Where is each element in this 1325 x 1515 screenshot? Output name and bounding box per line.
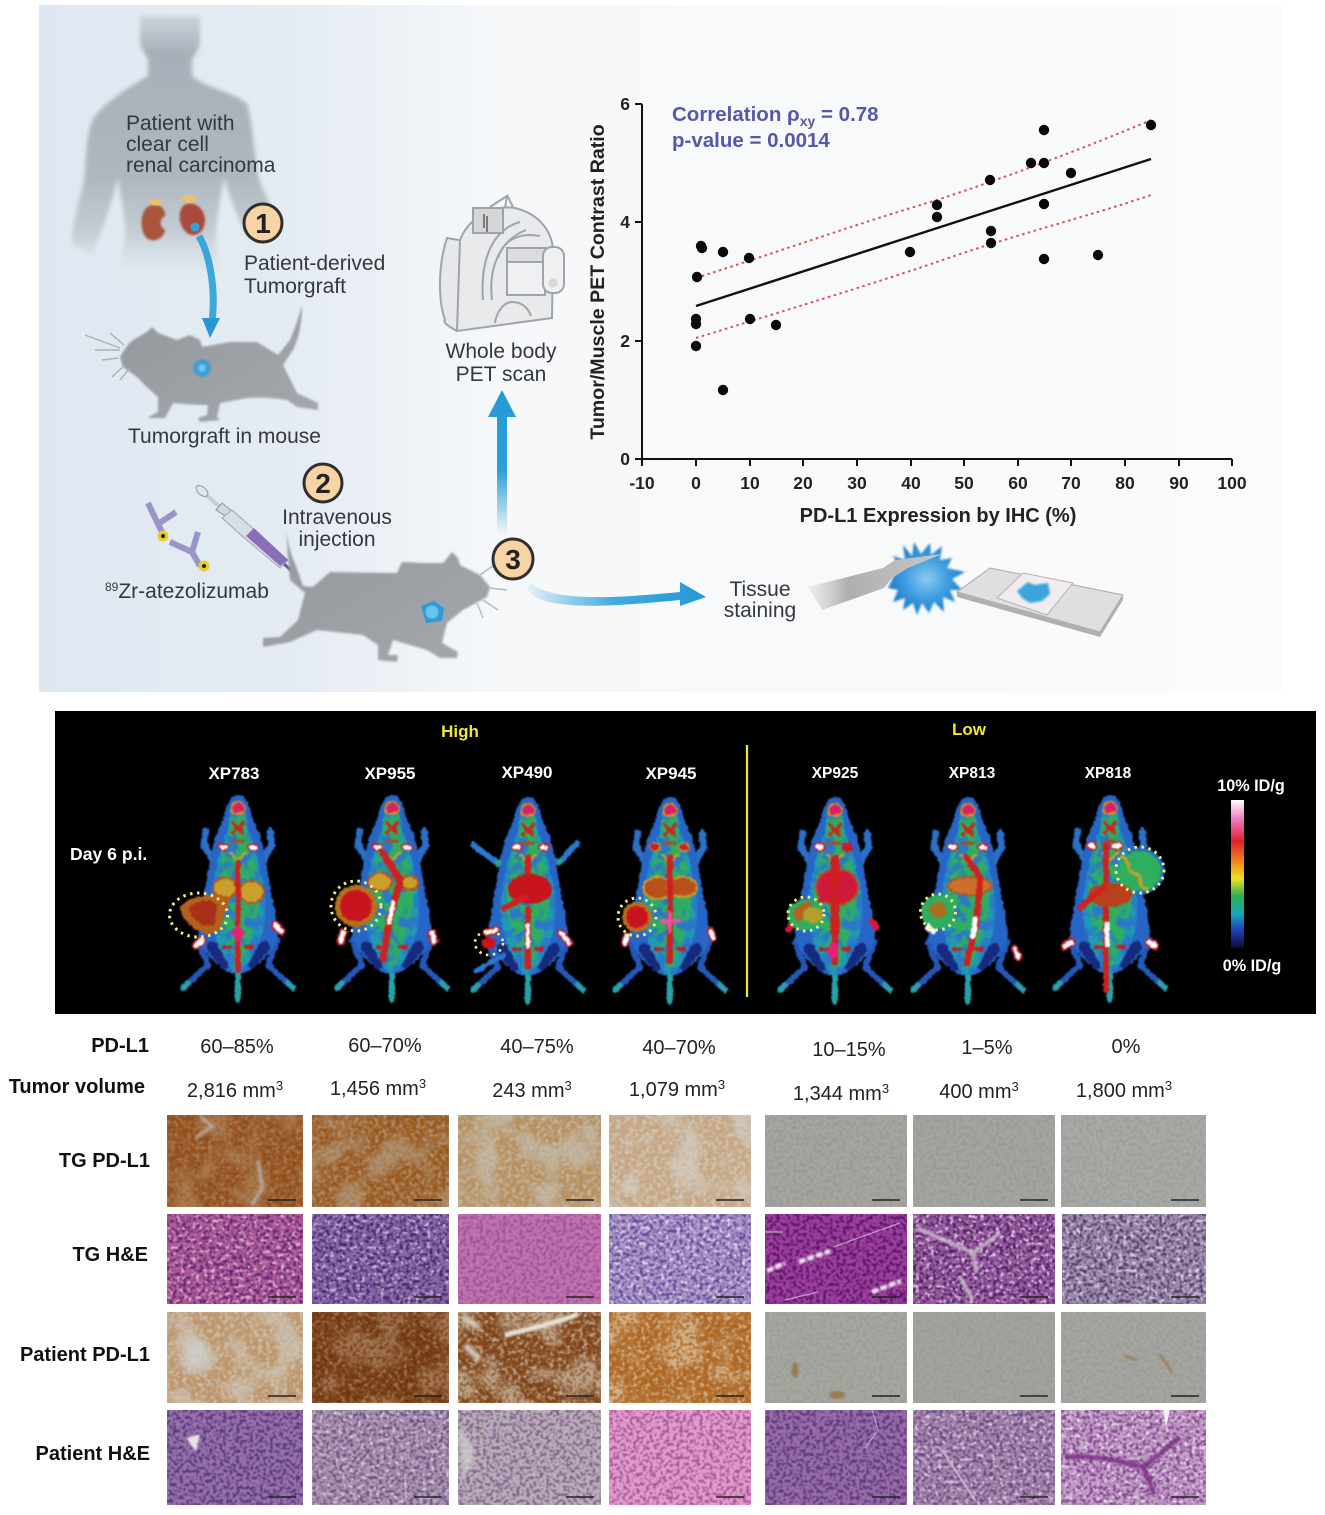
row: tumor volume: 3 [882,1081,889,1096]
legend: PET color scale [1217,777,1285,975]
row: tumor volume: 3 [1165,1078,1172,1093]
sample labels: XP945 [645,764,697,783]
divider: high vs low [746,745,748,997]
histology row: Patient PD-L1 [167,1312,1206,1403]
row: tumor volume: 3 [718,1077,725,1092]
heading: High: High [441,722,479,741]
x tick labels: 60 [1008,473,1028,493]
row: PD-L1 percentages: 10–15% [812,1039,886,1061]
text: whole body PET scan: PET scan [456,363,546,386]
row: tumor volume: 1,344 mm [793,1083,882,1105]
row: PD-L1 percentages: 0% [1112,1036,1141,1058]
y tick labels: 4 [620,212,630,232]
row: tumor volume: 2,816 mm [187,1080,276,1102]
icon: injected mouse [263,530,507,662]
row: tumor volume: 3 [1012,1079,1019,1094]
row: PD-L1 percentages: 1–5% [961,1037,1013,1059]
icon: PET scanner [440,195,564,331]
sample labels: XP783 [208,764,260,783]
arrow: to PET scan [488,390,516,535]
text: patient with clear cell renal carcinoma: clear cell [126,133,209,156]
PET mouse: XP813 [913,797,1023,1002]
x tick labels [629,473,1247,493]
icon: microtome blade [808,554,942,610]
histology row: Patient H&E [167,1410,1206,1505]
panel: workflow background [39,5,1282,692]
text: intravenous injection: injection [298,528,376,551]
arrow: kidney to mouse [199,236,220,338]
sample labels: XP813 [949,765,996,782]
row: tumor volume [9,1076,1172,1105]
row: PD-L1 percentages: PD-L1 [91,1035,149,1057]
row: tumor volume: 1,800 mm [1076,1080,1165,1102]
panel: tissue staining [724,542,1123,637]
text: 89Zr-atezolizumab: 89 [105,580,119,594]
row: PD-L1 percentages: 40–70% [642,1037,716,1059]
badge: step 3: 3 [505,544,521,575]
text: tissue staining: Tissue [729,578,791,601]
text: patient-derived tumorgraft: Tumorgraft [244,275,346,298]
label: Patient PD-L1: Patient PD-L1 [20,1344,150,1366]
PET mouse: XP490 [473,797,583,1002]
legend: PET color scale: 10% ID/g [1217,777,1285,795]
x tick labels: -10 [629,473,655,493]
icon: mouse with tumorgraft [85,305,318,422]
x tick labels: 50 [954,473,974,493]
PET mouse: XP783 [170,795,293,1000]
PET panel background [55,711,1316,1014]
text: day 6 p.i.: Day 6 p.i. [70,844,147,864]
text: whole body PET scan: Whole body [446,340,556,363]
row: tumor volume: 400 mm [939,1081,1012,1103]
correlation stats: Correlation ρ [672,103,800,126]
row: PD-L1 percentages: 60–70% [348,1035,422,1057]
PET mouse: XP945 [615,797,725,1002]
x tick labels: 100 [1217,473,1247,493]
x tick labels: 20 [793,473,813,493]
row: tumor volume: 3 [276,1078,283,1093]
x axis title: PD-L1 Expression by IHC (%) [800,505,1076,527]
panel: tracer injection [105,464,507,662]
x tick labels: 80 [1115,473,1135,493]
axes [635,104,1232,466]
text: tumorgraft in mouse: Tumorgraft in mouse [128,425,321,448]
x tick labels: 90 [1169,473,1189,493]
sample labels: XP490 [501,763,553,782]
correlation stats: xy [800,113,816,129]
histology row: TG H&E [167,1214,1206,1304]
heading: Low: Low [952,720,987,739]
text: patient with clear cell renal carcinoma: renal carcinoma [126,154,276,177]
text: 89Zr-atezolizumab: Zr-atezolizumab [118,580,269,603]
chart: PD-L1 vs tumor/muscle PET contrast [587,94,1247,527]
row: tumor volume: 243 mm [492,1080,565,1102]
panel: PET images [55,711,1316,1014]
icon: human silhouette [72,16,275,280]
histology row: TG PD-L1 [167,1115,1206,1207]
PET mouse: XP955 [331,795,447,1000]
row: tumor volume: 1,079 mm [629,1079,718,1101]
confidence band [696,120,1151,338]
data points [691,120,1156,395]
y tick labels: 0 [620,449,630,469]
row: PD-L1 percentages: 40–75% [500,1036,574,1058]
icon: radiolabeled antibodies [148,503,210,572]
text: tissue staining: staining [724,599,796,622]
text: patient-derived tumorgraft: Patient-derived [244,252,385,275]
arrow: to tissue staining [528,582,706,606]
y tick labels: 2 [620,331,630,351]
label: Patient H&E: Patient H&E [36,1443,150,1465]
correlation stats: = 0.78 [815,103,879,126]
regression line [696,159,1151,306]
row: tumor volume: 1,456 mm [330,1078,419,1100]
PET mouse: XP818 [1055,795,1165,1000]
badge: step 2: 2 [315,468,331,499]
y tick labels [620,94,630,469]
label: TG PD-L1: TG PD-L1 [59,1150,150,1172]
x tick labels: 70 [1061,473,1081,493]
PET mouse: XP925 [780,797,890,1002]
sample labels: XP818 [1085,765,1132,782]
row: PD-L1 percentages [91,1035,1141,1061]
sample labels [208,763,1132,783]
icon: kidneys [142,195,205,240]
icon: microscope slide [957,568,1123,637]
icon: syringe [194,483,295,574]
badge: step 3 [493,539,533,579]
legend: PET color scale: 0% ID/g [1223,957,1281,975]
row: tumor volume: 3 [565,1078,572,1093]
badge: step 1: 1 [255,208,271,239]
sample labels: XP955 [364,764,416,783]
text: patient with clear cell renal carcinoma: Patient with [126,112,235,135]
x tick labels: 40 [901,473,921,493]
x tick labels: 30 [847,473,867,493]
x tick labels: 10 [740,473,760,493]
icon: excised tumor [888,542,965,615]
y axis title: Tumor/Muscle PET Contrast Ratio [587,124,609,440]
text: intravenous injection: Intravenous [282,506,392,529]
y tick labels: 6 [620,94,630,114]
badge: step 1 [244,204,282,242]
row: tumor volume: 3 [419,1076,426,1091]
label: TG H&E: TG H&E [72,1244,148,1266]
badge: step 2 [304,464,342,502]
row: tumor volume: Tumor volume [9,1076,145,1098]
x tick labels: 0 [691,473,701,493]
correlation stats: p-value = 0.0014 [672,129,830,152]
row: PD-L1 percentages: 60–85% [200,1036,274,1058]
sample labels: XP925 [812,765,859,782]
panel: patient-derived tumorgraft [72,16,385,448]
